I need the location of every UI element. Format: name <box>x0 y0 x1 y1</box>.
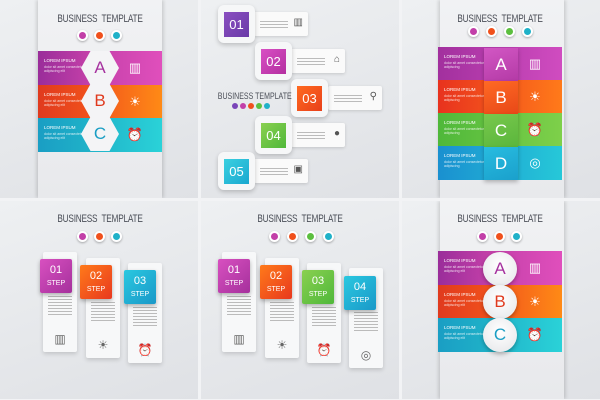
step 3 label: 03 <box>134 275 146 287</box>
step 4 card: ◎ <box>361 348 371 362</box>
band A: LOREM IPSUM <box>444 54 476 59</box>
band B: dolor sit amet consectetur adipiscing elit <box>444 298 484 307</box>
band A: ▥ <box>529 56 541 71</box>
band C: dolor sit amet consectetur adipiscing elit <box>44 132 84 140</box>
step 3 label: STEP <box>131 291 149 298</box>
step 1 label <box>218 259 250 293</box>
step 4 card <box>349 268 383 368</box>
band C <box>438 113 562 146</box>
band B <box>438 80 562 113</box>
band A: dolor sit amet consectetur adipiscing elit <box>44 64 84 73</box>
hex C: C <box>94 124 106 143</box>
box 02: 02 <box>266 54 281 69</box>
band A <box>438 251 562 285</box>
band A: dolor sit amet consectetur adipiscing elit <box>444 264 484 273</box>
box 03: 03 <box>302 91 317 106</box>
title: BUSINESS TEMPLATE <box>257 213 343 225</box>
step 4 label: STEP <box>351 297 369 304</box>
step 3 label <box>302 270 334 304</box>
band A: LOREM IPSUM <box>44 58 76 63</box>
step 3 card <box>307 263 341 363</box>
step 2 card: ☀ <box>98 338 108 352</box>
step 4 label: 04 <box>354 281 366 293</box>
legend dots <box>76 30 123 43</box>
panel: square ABCD <box>402 0 600 198</box>
dots <box>232 103 270 109</box>
band A: dolor sit amet consectetur adipiscing <box>444 60 484 69</box>
band B: ☀ <box>529 89 541 104</box>
circle A: A <box>494 259 506 278</box>
dots <box>76 231 123 244</box>
panel: 3 steps <box>0 201 198 399</box>
hex B: B <box>94 91 106 110</box>
hex B <box>81 84 119 118</box>
card 05 <box>254 159 308 183</box>
box 02 <box>255 42 292 80</box>
square D <box>484 147 518 180</box>
box 01: 01 <box>229 17 244 32</box>
title: BUSINESS TEMPLATE <box>218 91 292 101</box>
circle C: C <box>494 325 506 344</box>
band C: ⏰ <box>527 122 543 137</box>
band A <box>438 47 562 80</box>
step 1 label: STEP <box>225 280 243 287</box>
legend dots <box>467 26 534 39</box>
step 2 card: ☀ <box>277 338 287 352</box>
box 03 <box>291 79 328 117</box>
panel: 4 steps <box>201 201 399 399</box>
band B: ☀ <box>529 294 541 309</box>
circle C <box>483 318 517 352</box>
card 02: ⌂ <box>334 54 340 65</box>
step 3 label: 03 <box>312 275 324 287</box>
band C: dolor sit amet consectetur adipiscing <box>444 126 484 135</box>
title: BUSINESS TEMPLATE <box>57 13 143 25</box>
step 2 label <box>260 265 292 299</box>
card 01 <box>254 12 308 36</box>
band D: dolor sit amet consectetur adipiscing <box>444 160 484 168</box>
step 2 card <box>265 258 299 358</box>
band D <box>438 146 562 180</box>
card 04 <box>291 123 345 147</box>
band B <box>438 285 562 319</box>
dots <box>268 231 335 244</box>
card 05: ▣ <box>294 164 303 175</box>
square A <box>484 48 518 81</box>
step 1 card <box>222 252 256 352</box>
band A: ▥ <box>529 260 541 275</box>
square A: A <box>495 55 507 74</box>
step 1 card <box>43 252 77 352</box>
panel: hexagon ABC <box>0 0 198 198</box>
step 2 label: 02 <box>90 270 102 282</box>
square D: D <box>495 154 507 173</box>
title: BUSINESS TEMPLATE <box>57 213 143 225</box>
step 3 card: ⏰ <box>317 343 331 357</box>
band B: LOREM IPSUM <box>444 292 476 297</box>
step 3 label: STEP <box>309 291 327 298</box>
box 05 <box>218 152 255 190</box>
step 2 card <box>86 258 120 358</box>
box 04 <box>255 116 292 154</box>
box 01 <box>218 5 255 43</box>
square B <box>484 81 518 114</box>
step 4 label <box>344 276 376 310</box>
box 04: 04 <box>266 128 281 143</box>
square C <box>484 114 518 147</box>
step 3 card <box>128 263 162 363</box>
step 1 card: ▥ <box>54 332 66 346</box>
card 02 <box>291 49 345 73</box>
band C: LOREM IPSUM <box>444 325 476 330</box>
band B: dolor sit amet consectetur adipiscing elit <box>44 98 84 107</box>
band C: ⏰ <box>127 127 143 142</box>
dots <box>476 231 523 244</box>
step 2 label <box>80 265 112 299</box>
panel: numbered steps 01-05 <box>201 0 399 198</box>
band D: ◎ <box>529 155 541 170</box>
band B: ☀ <box>129 94 141 109</box>
card 04: ● <box>334 128 340 139</box>
band B: LOREM IPSUM <box>444 87 476 92</box>
hex A: A <box>94 58 106 77</box>
title: BUSINESS TEMPLATE <box>457 213 543 225</box>
band C <box>38 118 162 152</box>
step 3 label <box>124 270 156 304</box>
band C: LOREM IPSUM <box>44 125 76 130</box>
hex C <box>81 117 119 151</box>
band A: ▥ <box>129 60 141 75</box>
band C <box>438 318 562 352</box>
title: BUSINESS TEMPLATE <box>457 13 543 25</box>
band C: LOREM IPSUM <box>444 120 476 125</box>
band D: LOREM IPSUM <box>444 153 476 158</box>
square B: B <box>495 88 507 107</box>
band B: LOREM IPSUM <box>44 92 76 97</box>
card 01: ▥ <box>294 17 303 28</box>
step 1 label: STEP <box>47 280 65 287</box>
step 1 label <box>40 259 72 293</box>
step 1 label: 01 <box>50 264 62 276</box>
band C: dolor sit amet consectetur adipiscing elit <box>444 332 484 340</box>
step 2 label: STEP <box>267 286 285 293</box>
square C: C <box>495 121 507 140</box>
step 2 label: STEP <box>87 286 105 293</box>
circle B: B <box>494 292 506 311</box>
panel: circle ABC <box>402 201 600 399</box>
step 1 label: 01 <box>228 264 240 276</box>
band A <box>38 51 162 85</box>
band C: ⏰ <box>527 327 543 342</box>
band A: LOREM IPSUM <box>444 258 476 263</box>
band B: dolor sit amet consectetur adipiscing <box>444 94 484 102</box>
box 05: 05 <box>229 164 244 179</box>
card 03: ⚲ <box>370 91 377 102</box>
step 1 card: ▥ <box>233 332 245 346</box>
step 3 card: ⏰ <box>138 343 152 357</box>
hex A <box>81 51 119 85</box>
circle A <box>483 252 517 286</box>
card 03 <box>328 86 382 110</box>
circle B <box>483 285 517 319</box>
band B <box>38 85 162 119</box>
step 2 label: 02 <box>270 270 282 282</box>
